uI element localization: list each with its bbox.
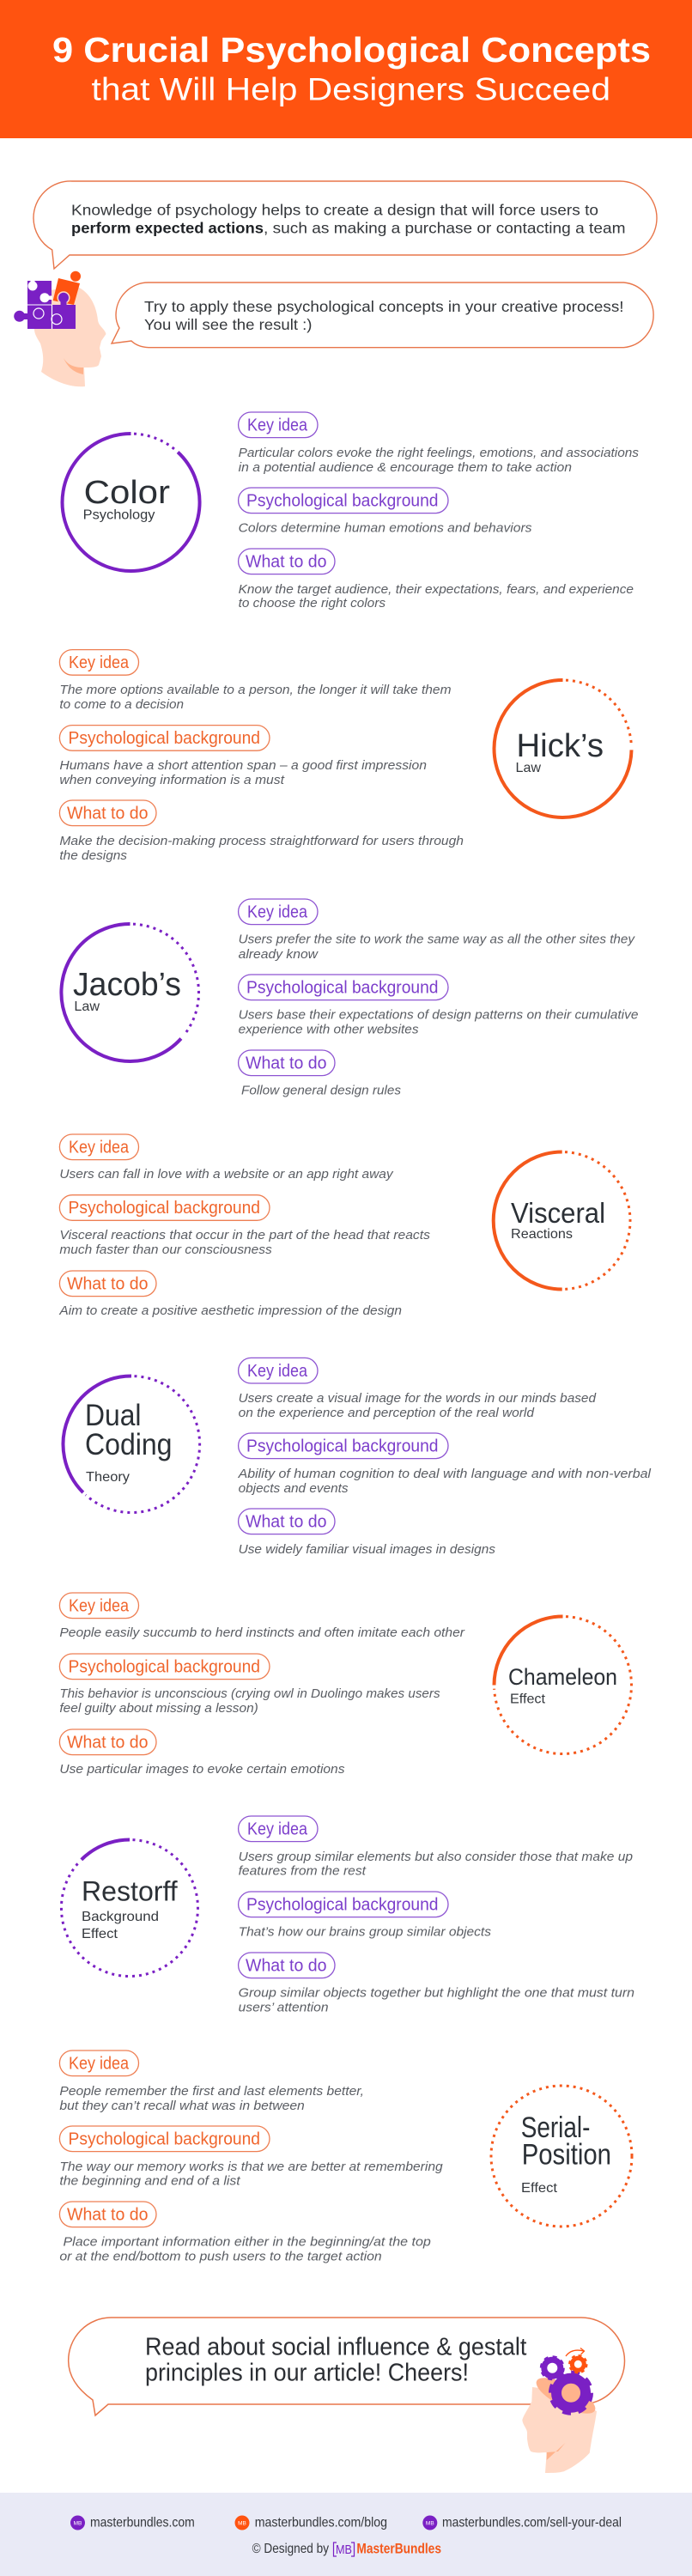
text: what to do xyxy=(239,1986,634,2014)
pill: key idea xyxy=(59,650,139,675)
text: what to do xyxy=(239,582,634,611)
text: what to do: Group similar objects together but highlight the one that must turn xyxy=(239,1986,634,2001)
pill: what to do xyxy=(59,2202,156,2227)
pill: psychological background: Psychological background xyxy=(246,979,438,998)
pill: key idea xyxy=(239,899,318,925)
link: masterbundles.com/sell-your-deal: MB xyxy=(426,2520,434,2526)
pill: key idea: Key idea xyxy=(69,2054,130,2073)
heading: Restorff Background Effect xyxy=(82,1876,178,1941)
text: key idea: The more options available to a person, the longer it will take them xyxy=(59,683,452,697)
pill: what to do: What to do xyxy=(246,1513,326,1532)
intro speech bubble two: You will see the result :) xyxy=(144,316,313,333)
pill: psychological background: Psychological background xyxy=(69,2129,260,2148)
heading: Visceral Reactions xyxy=(511,1197,605,1242)
pill: psychological background: Psychological background xyxy=(246,1896,438,1915)
heading: Serial-Position Effect xyxy=(521,2111,611,2196)
text: what to do: Place important information either in the beginning/at the top xyxy=(64,2235,431,2250)
text: what to do: Use particular images to evoke certain emotions xyxy=(59,1762,345,1777)
intro speech bubble two xyxy=(112,283,653,348)
progress ring: Chameleon xyxy=(495,1616,631,1754)
pill: key idea: Key idea xyxy=(247,903,308,922)
text: what to do: to choose the right colors xyxy=(239,596,386,611)
text: key idea: Particular colors evoke the right feelings, emotions, and associations xyxy=(239,446,639,460)
text: psychological background: feel guilty about missing a lesson) xyxy=(59,1701,258,1716)
text: psychological background: Humans have a short attention span – a good first impression xyxy=(59,758,427,773)
text: what to do: the designs xyxy=(59,848,127,863)
pill: key idea xyxy=(239,1816,318,1842)
text: what to do: Follow general design rules xyxy=(241,1084,401,1097)
text: psychological background: when conveying information is a must xyxy=(59,773,285,787)
heading: Chameleon Effect xyxy=(508,1664,617,1707)
text: key idea xyxy=(59,683,452,712)
pill: what to do xyxy=(59,800,156,826)
section: Restorff Background Effect xyxy=(61,1816,634,2014)
pill: key idea xyxy=(59,1593,139,1619)
text: what to do: or at the end/bottom to push users to the target action xyxy=(59,2250,382,2263)
pill: what to do xyxy=(239,549,335,574)
heading: Dual Coding Theory xyxy=(85,1399,172,1485)
pill: what to do: What to do xyxy=(246,553,326,572)
intro speech bubble one: , such as making a purchase or contacting a team xyxy=(264,220,625,237)
text: key idea xyxy=(239,446,639,475)
pill: psychological background: Psychological background xyxy=(246,1437,438,1456)
heading: Restorff Background Effect: Background xyxy=(82,1910,159,1924)
text: what to do: Aim to create a positive aesthetic impression of the design xyxy=(58,1303,402,1318)
pill: psychological background: Psychological background xyxy=(246,491,438,510)
text: key idea: on the experience and perception of the real world xyxy=(239,1406,535,1420)
intro speech bubble one: perform expected actions xyxy=(71,220,264,237)
text: key idea: Users create a visual image for the words in our minds based xyxy=(239,1391,597,1406)
text: psychological background: The way our memory works is that we are better at remembering xyxy=(59,2160,443,2174)
text: key idea: People remember the first and last elements better, xyxy=(59,2084,364,2099)
text: psychological background xyxy=(238,1467,652,1496)
heading: Color Psychology: Psychology xyxy=(83,508,155,523)
pill: key idea: Key idea xyxy=(69,1597,130,1616)
text: psychological background: Visceral reactions that occur in the part of the head that reacts xyxy=(59,1228,431,1242)
pill: what to do: What to do xyxy=(246,1054,326,1073)
pill: what to do: What to do xyxy=(67,804,148,823)
link: masterbundles.com: MB xyxy=(74,2520,82,2526)
closing speech bubble xyxy=(69,2318,625,2415)
section: Chameleon Effect xyxy=(59,1593,631,1777)
text: key idea: Users prefer the site to work the same way as all the other sites they xyxy=(239,933,636,947)
credit: designed by MasterBundles xyxy=(252,2540,441,2557)
pill: key idea xyxy=(59,1134,139,1160)
heading: Restorff Background Effect: Restorff xyxy=(82,1876,178,1907)
text: psychological background: Users base their expectations of design patterns on their cumulative xyxy=(239,1008,639,1022)
intro speech bubble two: Try to apply these psychological concepts in your creative process! xyxy=(144,298,623,315)
text: key idea: People easily succumb to herd instincts and often imitate each other xyxy=(59,1625,465,1640)
pill: key idea xyxy=(239,1358,318,1383)
text: key idea: Users can fall in love with a website or an app right away xyxy=(59,1167,394,1182)
text: psychological background: objects and events xyxy=(239,1481,349,1496)
text: key idea xyxy=(239,933,636,962)
pill: key idea: Key idea xyxy=(247,1362,308,1381)
heading: Visceral Reactions: Visceral xyxy=(511,1197,605,1229)
credit: designed by MasterBundles: © Designed by xyxy=(252,2542,329,2556)
pill: what to do xyxy=(59,1729,156,1755)
progress ring: Restorff xyxy=(61,1839,197,1977)
pill: what to do: What to do xyxy=(67,1274,148,1293)
pill: key idea: Key idea xyxy=(247,416,308,434)
link: masterbundles.com/sell-your-deal: masterbundles.com/sell-your-deal xyxy=(442,2516,622,2530)
section: Visceral Reactions xyxy=(58,1134,630,1318)
text: psychological background: much faster than our consciousness xyxy=(59,1242,272,1257)
text: what to do: Use widely familiar visual images in designs xyxy=(239,1542,495,1557)
pill: key idea xyxy=(59,2050,139,2076)
credit: designed by MasterBundles: MB xyxy=(336,2543,352,2557)
text: key idea: already know xyxy=(239,947,319,962)
text: psychological background xyxy=(59,2160,443,2189)
text: what to do: Know the target audience, their expectations, fears, and experience xyxy=(239,582,634,597)
text: psychological background: the beginning and end of a list xyxy=(59,2174,241,2189)
text: psychological background xyxy=(239,1008,639,1037)
text: what to do: users’ attention xyxy=(239,2001,328,2014)
pill: key idea: Key idea xyxy=(69,1139,130,1157)
text: psychological background: This behavior is unconscious (crying owl in Duolingo makes users xyxy=(59,1686,440,1701)
pill: key idea: Key idea xyxy=(247,1820,308,1839)
heading: Hick's Law: Law xyxy=(515,761,541,775)
text: psychological background xyxy=(59,1228,431,1257)
pill: what to do xyxy=(239,1050,335,1076)
icon: head with puzzle pieces xyxy=(14,271,106,386)
heading: Jacob's Law: Jacob’s xyxy=(73,967,181,1003)
pill: psychological background: Psychological background xyxy=(69,729,260,748)
text: key idea xyxy=(239,1850,633,1879)
progress ring: Visceral xyxy=(494,1152,630,1290)
text: what to do xyxy=(59,834,464,863)
heading: Dual Coding Theory: Theory xyxy=(86,1470,130,1485)
heading: Serial-Position Effect: Effect xyxy=(521,2181,558,2196)
heading: Serial-Position Effect: Serial- xyxy=(521,2111,590,2144)
heading: Visceral Reactions: Reactions xyxy=(511,1227,573,1242)
pill: psychological background: Psychological background xyxy=(69,1199,260,1218)
text: psychological background: Colors determine human emotions and behaviors xyxy=(239,521,532,536)
text: psychological background: Ability of human cognition to deal with language and with non-verbal xyxy=(238,1467,652,1481)
pill: key idea xyxy=(239,412,318,438)
text: psychological background: That’s how our brains group similar objects xyxy=(239,1925,492,1940)
text: psychological background xyxy=(59,1686,440,1716)
text: key idea: in a potential audience & encourage them to take action xyxy=(239,460,572,475)
pill: what to do xyxy=(239,1953,335,1978)
pill: what to do: What to do xyxy=(67,1733,148,1752)
pill: psychological background: Psychological background xyxy=(69,1657,260,1676)
section: Serial-Position Effect xyxy=(59,2050,632,2263)
intro speech bubble one: Knowledge of psychology helps to create a design that will force users to xyxy=(71,201,598,218)
pill: what to do: What to do xyxy=(246,1956,326,1975)
section: Dual Coding Theory xyxy=(64,1358,652,1557)
heading: Restorff Background Effect: Effect xyxy=(82,1927,118,1941)
section: Color Psychology xyxy=(63,412,639,611)
heading: Chameleon Effect: Effect xyxy=(510,1692,546,1707)
credit: designed by MasterBundles: MasterBundles xyxy=(356,2540,441,2557)
progress ring: Color xyxy=(63,434,200,571)
heading: Hick's Law: Hick’s xyxy=(517,728,604,764)
link: masterbundles.com/blog: MB xyxy=(238,2520,246,2526)
text: key idea xyxy=(239,1391,597,1420)
text: key idea: to come to a decision xyxy=(59,697,184,712)
pill: what to do: What to do xyxy=(67,2205,148,2224)
section: Hick's Law xyxy=(59,650,631,863)
heading: Chameleon Effect: Chameleon xyxy=(508,1664,617,1690)
text: key idea: but they can’t recall what was in between xyxy=(59,2099,305,2113)
header banner xyxy=(0,0,692,138)
intro speech bubble one xyxy=(33,181,657,269)
pill: what to do xyxy=(59,1271,156,1297)
text: key idea: features from the rest xyxy=(239,1864,367,1879)
title line two: that Will Help Designers Succeed xyxy=(91,72,610,106)
progress ring: Hick's xyxy=(495,680,632,817)
progress ring: Dual Coding xyxy=(64,1376,200,1513)
pill: key idea: Key idea xyxy=(69,653,130,672)
heading: Jacob's Law: Law xyxy=(74,999,100,1014)
progress ring: Jacob's xyxy=(61,924,198,1061)
link: masterbundles.com/blog: masterbundles.com/blog xyxy=(255,2516,387,2530)
footer band xyxy=(0,2493,692,2576)
heading: Serial-Position Effect: Position xyxy=(522,2139,611,2172)
heading: Color Psychology: Color xyxy=(84,475,170,511)
text: psychological background: experience with other websites xyxy=(239,1022,419,1037)
text: key idea: Users group similar elements but also consider those that make up xyxy=(239,1850,633,1864)
closing speech bubble: principles in our article! Cheers! xyxy=(145,2360,469,2387)
closing speech bubble: Read about social influence & gestalt xyxy=(145,2334,526,2361)
link: masterbundles.com: masterbundles.com xyxy=(90,2516,195,2530)
text: key idea xyxy=(59,2084,364,2113)
section: Jacob's Law xyxy=(61,899,639,1097)
text: what to do xyxy=(59,2235,431,2263)
text: what to do: Make the decision-making process straightforward for users through xyxy=(59,834,464,848)
pill: what to do xyxy=(239,1509,335,1534)
title line one: 9 Crucial Psychological Concepts xyxy=(52,30,651,70)
heading: Dual Coding Theory: Dual xyxy=(85,1399,141,1432)
heading: Color Psychology xyxy=(83,475,170,523)
text: psychological background xyxy=(59,758,427,787)
heading: Dual Coding Theory: Coding xyxy=(85,1428,172,1461)
progress ring: Serial-Position xyxy=(491,2086,632,2227)
icon: head with gears xyxy=(522,2348,600,2473)
